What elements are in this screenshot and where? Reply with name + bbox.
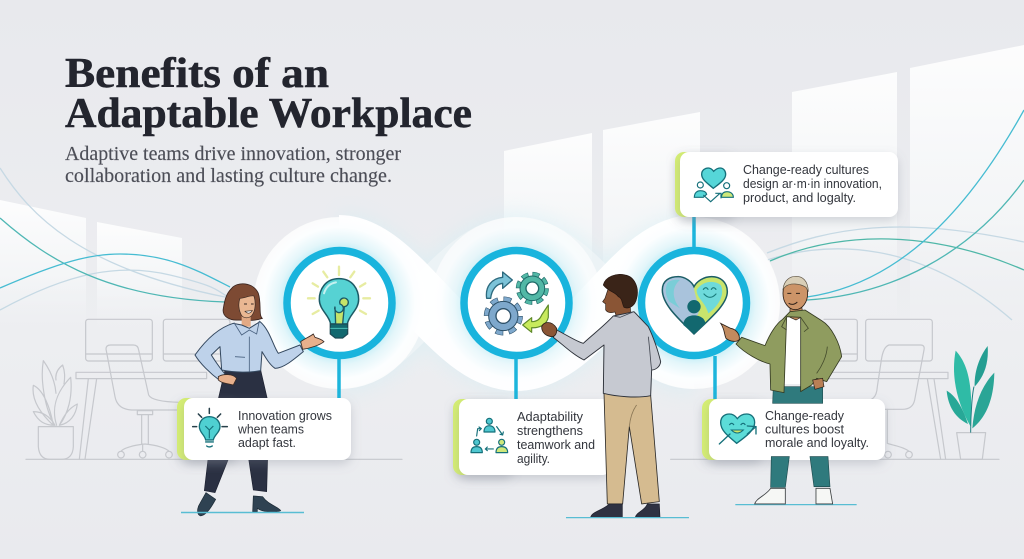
- trousers upper: [773, 387, 823, 403]
- ribbon glow: [339, 243, 694, 363]
- icon: team cycle: [471, 418, 508, 453]
- woman presenter: [195, 284, 324, 516]
- pale strand: [339, 243, 694, 363]
- pocket hand: [813, 378, 824, 389]
- face details: [787, 293, 800, 304]
- icon: small bulb: [193, 408, 227, 447]
- card: morale: [702, 399, 885, 460]
- text: agility.: [517, 452, 550, 466]
- icon: light bulb: [308, 267, 370, 338]
- shoes: [591, 504, 660, 517]
- card: adaptability: [453, 399, 611, 475]
- ground line: [735, 503, 857, 507]
- head: [783, 277, 808, 310]
- shoes: [198, 493, 281, 516]
- text: Adaptability: [517, 410, 584, 424]
- card: change-ready cultures: [675, 152, 898, 217]
- trousers lower: [771, 457, 830, 487]
- text: Innovation grows: [238, 409, 332, 423]
- neck and face: [603, 288, 631, 317]
- subtitle: Adaptive teams drive innovation, stronger: [65, 143, 401, 165]
- text: cultures boost: [765, 422, 845, 436]
- text: product, and logalty.: [743, 191, 856, 205]
- text: when teams: [237, 422, 304, 436]
- text: strengthens: [517, 424, 583, 438]
- circle: innovation: [287, 250, 392, 356]
- background windows: [0, 45, 1024, 340]
- card: innovation: [177, 398, 351, 460]
- flowing lines right: [767, 110, 1024, 320]
- circle: culture: [642, 250, 746, 356]
- hand on hip: [218, 375, 237, 385]
- icon: gears and arrows: [486, 272, 548, 333]
- trousers upper: [217, 370, 268, 403]
- man centre: [542, 274, 689, 518]
- trousers lower: [204, 457, 268, 493]
- text: Change-ready cultures: [743, 163, 869, 177]
- short hair: [783, 276, 808, 292]
- hand: [542, 322, 557, 337]
- shirt: [553, 312, 661, 397]
- shoes: [755, 488, 833, 504]
- neck: [242, 315, 251, 327]
- circle: adaptability: [464, 250, 569, 356]
- icon: heart and people: [694, 168, 733, 202]
- man right: [721, 276, 857, 505]
- title: Adaptable Workplace: [65, 91, 472, 137]
- text: teamwork and: [517, 438, 595, 452]
- jacket: [736, 310, 842, 393]
- neck: [790, 305, 803, 320]
- text: design ar·m·in innovation,: [743, 177, 882, 191]
- hair back: [223, 284, 262, 320]
- text: Change-ready: [765, 409, 845, 423]
- gesturing hand: [301, 334, 324, 349]
- woman ground line: [181, 512, 304, 514]
- face: [239, 296, 255, 318]
- office desk left: [26, 319, 402, 459]
- hair: [603, 274, 637, 308]
- connector lines: [339, 216, 715, 400]
- flowing lines left: [0, 168, 230, 310]
- pointing hand: [721, 323, 739, 341]
- trousers: [604, 393, 659, 504]
- infinity ribbon: [339, 243, 694, 363]
- text: morale and loyalty.: [765, 436, 869, 450]
- icon: smiling heart: [719, 414, 756, 444]
- subtitle: collaboration and lasting culture change.: [65, 165, 392, 187]
- title: Benefits of an: [65, 51, 329, 97]
- icon: heart with person: [662, 277, 727, 334]
- ground line: [566, 516, 689, 520]
- office desk right: [671, 319, 999, 459]
- white tee: [784, 317, 804, 384]
- halos: [254, 217, 780, 389]
- shirt and arms: [195, 322, 303, 381]
- text: adapt fast.: [238, 436, 296, 450]
- bright strand: [339, 243, 694, 363]
